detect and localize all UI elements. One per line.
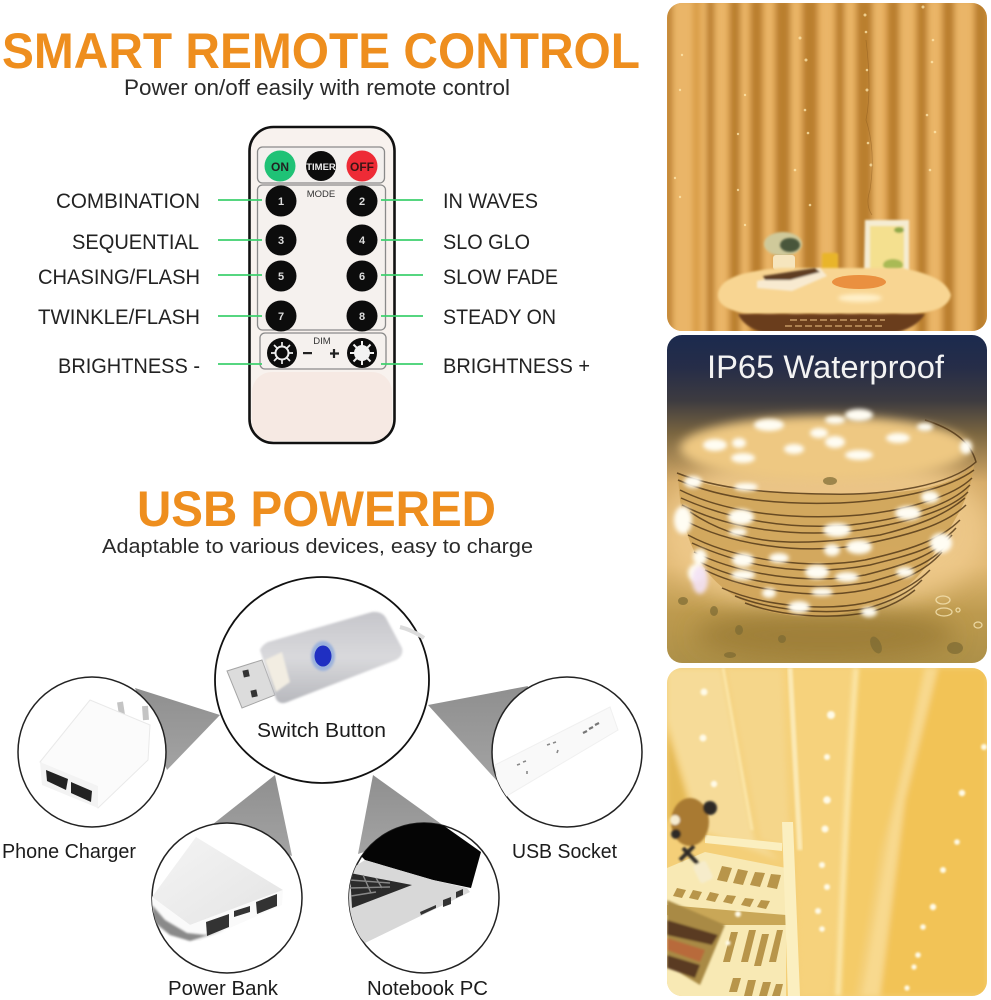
label: chasing flash: CHASING/FLASH (38, 266, 200, 289)
circle: usb socket (492, 677, 642, 827)
dim button group (260, 333, 386, 369)
power bank icon (152, 837, 283, 941)
heading: ip65 waterproof: IP65 Waterproof (707, 349, 944, 385)
mode button group: 7 (278, 311, 284, 323)
photo panel: ip65 waterproof (660, 335, 990, 663)
mode button group: 4 (359, 235, 366, 247)
photo panel: curtain with table (667, 0, 987, 340)
shelf gaps (673, 866, 783, 996)
title: smart remote control: SMART REMOTE CONTROL (2, 23, 640, 79)
photo panel: bright curtain with shelf (667, 668, 987, 996)
label: combination: COMBINATION (56, 190, 200, 213)
label: brightness minus: BRIGHTNESS - (58, 355, 200, 378)
curtain pleats (667, 0, 987, 340)
label: switch button: Switch Button (257, 720, 386, 742)
title: usb powered: USB POWERED (137, 481, 496, 537)
subtitle: remote: Power on/off easily with remote control (124, 75, 510, 100)
power button group (258, 147, 384, 183)
label: sequential: SEQUENTIAL (72, 231, 199, 254)
string lights (674, 6, 936, 226)
mode button group (258, 185, 386, 332)
mode button group: 1 (278, 196, 284, 208)
yellow cup (822, 253, 838, 274)
mode button group: MODE (307, 189, 335, 200)
usb body (260, 612, 402, 703)
orange plate (832, 275, 886, 289)
dim button group: DIM (313, 336, 331, 347)
fairy lights (700, 688, 987, 991)
shelf (667, 822, 800, 996)
books (757, 268, 827, 291)
mode button group: 2 (359, 196, 365, 208)
mode button group: 3 (278, 235, 284, 247)
callout lines (218, 200, 423, 364)
table top (718, 268, 951, 314)
led glow points (674, 409, 972, 617)
mode button group: 5 (278, 271, 284, 283)
charger icon (40, 700, 150, 808)
table basket (738, 312, 926, 331)
power button group: ON (271, 160, 289, 174)
picture frame (864, 220, 909, 279)
mode button group: 8 (359, 311, 365, 323)
remote control (250, 127, 394, 443)
power strip icon (495, 707, 618, 800)
label: phone charger: Phone Charger (2, 841, 136, 863)
stacked books (667, 900, 725, 985)
curtain drapes (667, 668, 987, 996)
laptop icon (349, 823, 481, 943)
dried flowers (670, 798, 717, 884)
circle: notebook pc (349, 823, 499, 973)
label: in waves: IN WAVES (443, 190, 538, 213)
label: notebook pc: Notebook PC (367, 978, 488, 1000)
connector wedges (135, 686, 528, 856)
mode button group: 6 (359, 271, 365, 283)
circle: switch button (215, 577, 429, 783)
table glow (667, 466, 987, 617)
power button group: TIMER (306, 162, 336, 173)
usb cable (400, 627, 424, 638)
label: usb socket: USB Socket (512, 841, 617, 863)
circle: phone charger (18, 677, 166, 827)
power button group: OFF (350, 160, 374, 174)
label: slo glo: SLO GLO (443, 231, 530, 254)
water droplets (678, 477, 963, 658)
subtitle: usb: Adaptable to various devices, easy to charge (102, 536, 533, 558)
wire coil (677, 416, 976, 616)
blue switch button (311, 641, 335, 671)
label: power bank: Power Bank (168, 978, 279, 1000)
circle: power bank (152, 823, 302, 973)
flower vase (764, 232, 802, 270)
label: slow fade: SLOW FADE (443, 266, 558, 289)
usb plug (227, 660, 275, 708)
label: twinkle flash: TWINKLE/FLASH (38, 306, 200, 329)
label: brightness plus: BRIGHTNESS + (443, 355, 590, 378)
label: steady on: STEADY ON (443, 306, 556, 329)
